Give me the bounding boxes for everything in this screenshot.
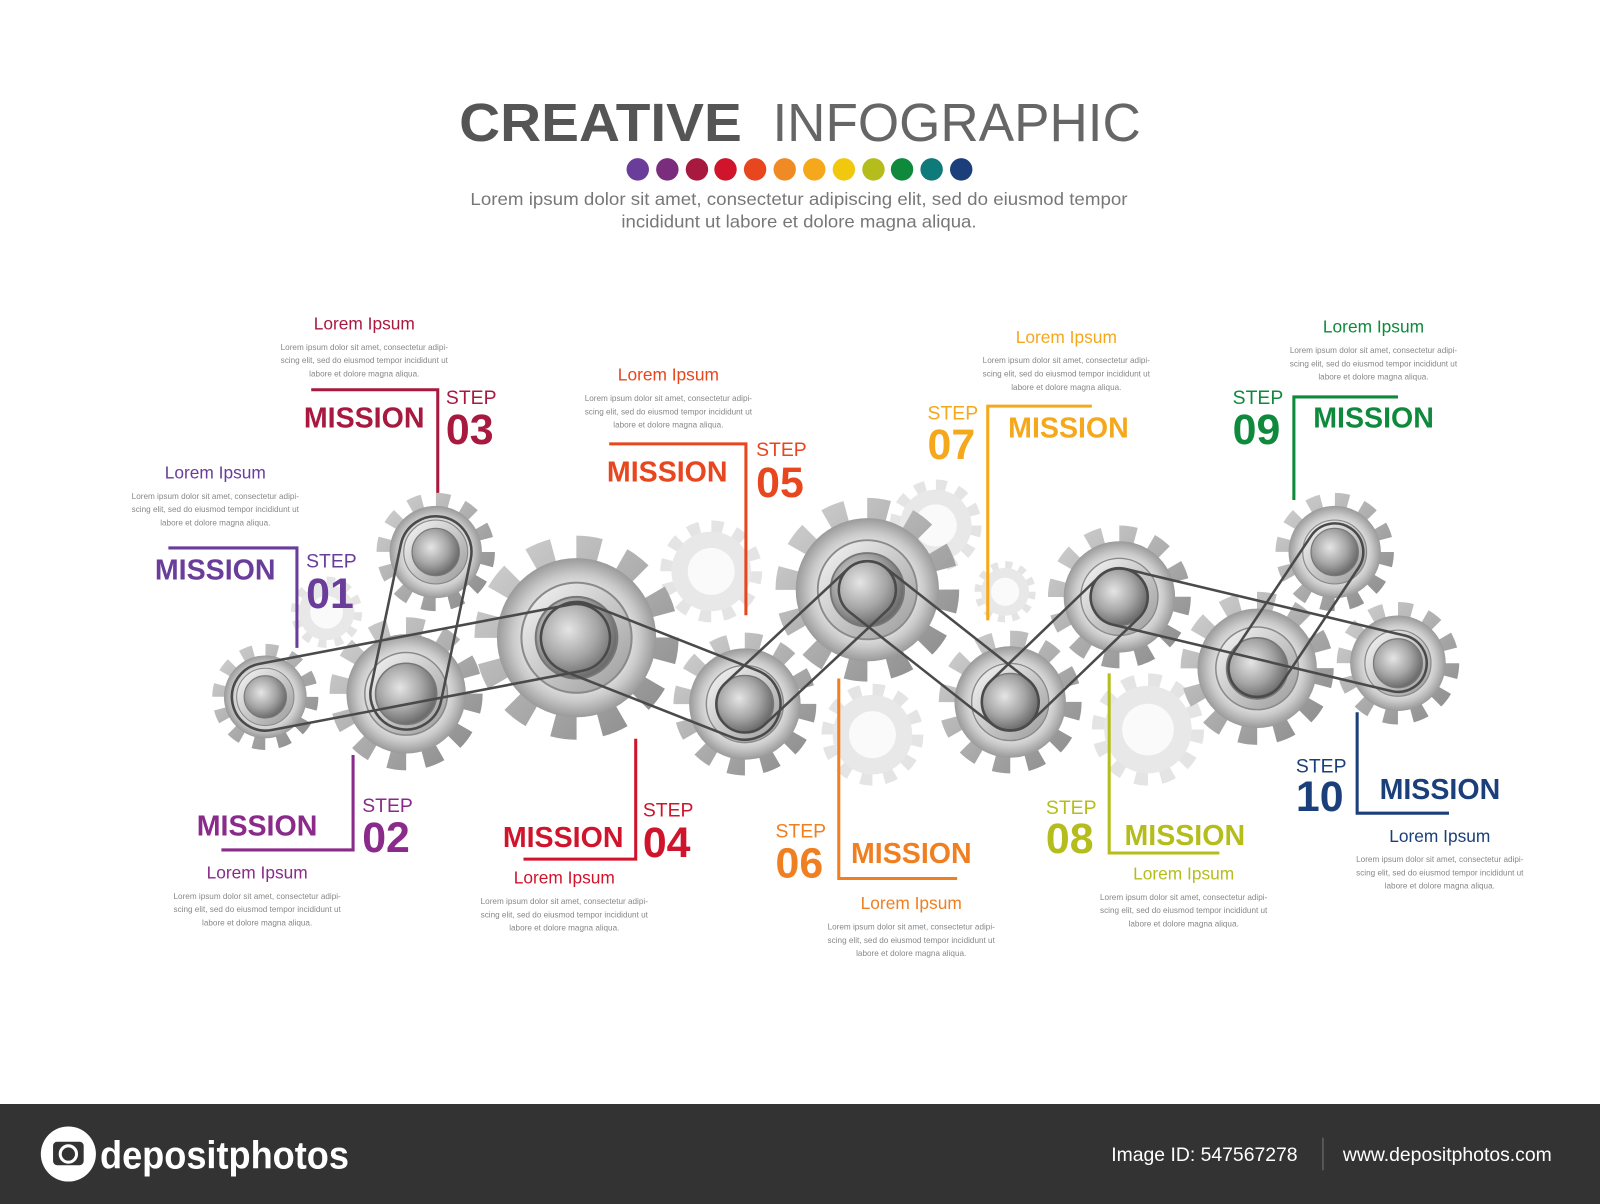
step 04: Lorem Ipsum: [514, 868, 615, 888]
step 01: scing elit, sed do eiusmod tempor incididunt ut: [132, 505, 300, 514]
step 02: STEP: [362, 795, 413, 817]
step 03: Lorem Ipsum: [314, 314, 415, 334]
footer logo: [41, 1126, 349, 1182]
step 04: STEP: [643, 799, 693, 821]
step 10: [1296, 712, 1524, 891]
step 09: STEP: [1233, 387, 1283, 409]
subtitle: [470, 189, 1128, 232]
step 02: scing elit, sed do eiusmod tempor incididunt ut: [173, 905, 342, 914]
step 07: labore et dolore magna aliqua.: [1011, 383, 1121, 392]
step 01: 01: [306, 570, 354, 618]
step 10: Lorem ipsum dolor sit amet, consectetur adipi-: [1356, 855, 1524, 864]
belts: [226, 510, 1433, 750]
step 08: STEP: [1046, 797, 1097, 819]
step 08: Lorem Ipsum: [1133, 864, 1234, 884]
step 01: labore et dolore magna aliqua.: [160, 518, 270, 527]
step 03: Lorem ipsum dolor sit amet, consectetur adipi-: [281, 343, 448, 352]
step 08: MISSION: [1124, 820, 1245, 852]
title: INFOGRAPHIC: [772, 93, 1141, 153]
step 04: Lorem ipsum dolor sit amet, consectetur adipi-: [481, 897, 648, 906]
step 09: Lorem Ipsum: [1323, 317, 1424, 337]
step 03: 03: [446, 406, 494, 454]
step 03: scing elit, sed do eiusmod tempor incididunt ut: [281, 356, 449, 365]
step 10: MISSION: [1380, 774, 1500, 806]
step 01: Lorem Ipsum: [165, 463, 266, 483]
color dots: [627, 158, 972, 181]
step 05: [585, 365, 807, 615]
step 06: STEP: [776, 821, 826, 843]
step 03: [281, 314, 497, 493]
step 07: [928, 327, 1151, 620]
step 05: 05: [756, 459, 804, 507]
step 09: labore et dolore magna aliqua.: [1318, 373, 1429, 382]
step 08: Lorem ipsum dolor sit amet, consectetur adipi-: [1100, 893, 1268, 902]
step 09: scing elit, sed do eiusmod tempor incididunt ut: [1290, 359, 1458, 368]
step 05: STEP: [756, 439, 807, 461]
title: CREATIVE: [459, 93, 742, 153]
step 06: Lorem ipsum dolor sit amet, consectetur adipi-: [828, 923, 995, 932]
step 06: labore et dolore magna aliqua.: [856, 949, 966, 958]
step 04: 04: [643, 819, 691, 867]
step 08: labore et dolore magna aliqua.: [1129, 919, 1239, 928]
step 08: scing elit, sed do eiusmod tempor incididunt ut: [1100, 906, 1268, 915]
step 07: Lorem Ipsum: [1016, 327, 1117, 347]
step 10: scing elit, sed do eiusmod tempor incididunt ut: [1356, 868, 1524, 877]
step 05: Lorem ipsum dolor sit amet, consectetur adipi-: [585, 394, 752, 403]
title: [459, 93, 1141, 153]
step 05: labore et dolore magna aliqua.: [613, 421, 723, 430]
footer info: www.depositphotos.com: [1342, 1144, 1552, 1166]
step 02: Lorem Ipsum: [207, 863, 308, 883]
step 09: MISSION: [1313, 403, 1434, 435]
step 03: MISSION: [304, 403, 424, 435]
step 01: [132, 463, 357, 648]
footer logo: depositphotos: [100, 1134, 349, 1177]
step 10: 10: [1296, 773, 1344, 821]
step 04: MISSION: [503, 822, 623, 854]
step 09: [1233, 317, 1458, 500]
footer info: [1111, 1138, 1552, 1170]
step 04: scing elit, sed do eiusmod tempor incididunt ut: [481, 910, 649, 919]
gear train: [220, 501, 1451, 765]
step 06: Lorem Ipsum: [861, 893, 962, 913]
subtitle: Lorem ipsum dolor sit amet, consectetur adipiscing elit, sed do eiusmod tempor: [470, 189, 1128, 209]
step 02: labore et dolore magna aliqua.: [202, 918, 312, 927]
step 07: MISSION: [1008, 413, 1129, 445]
step 08: 08: [1046, 815, 1094, 863]
step 02: MISSION: [197, 811, 317, 843]
step 02: Lorem ipsum dolor sit amet, consectetur adipi-: [173, 892, 341, 901]
step 01: Lorem ipsum dolor sit amet, consectetur adipi-: [132, 492, 299, 501]
background gears: [296, 486, 1196, 779]
footer info: Image ID: 547567278: [1111, 1144, 1298, 1166]
step 02: [173, 755, 413, 927]
step 06: [776, 679, 996, 958]
step 07: Lorem ipsum dolor sit amet, consectetur adipi-: [983, 356, 1150, 365]
step 03: labore et dolore magna aliqua.: [309, 370, 419, 379]
step 01: STEP: [306, 550, 357, 572]
step 07: 07: [928, 421, 975, 469]
footer bar: [0, 1104, 1600, 1204]
step 10: labore et dolore magna aliqua.: [1385, 882, 1495, 891]
step 01: MISSION: [155, 555, 276, 587]
step 05: scing elit, sed do eiusmod tempor incididunt ut: [585, 407, 753, 416]
step 10: Lorem Ipsum: [1389, 826, 1490, 846]
step 09: Lorem ipsum dolor sit amet, consectetur adipi-: [1290, 346, 1457, 355]
step 06: 06: [776, 839, 823, 887]
step 06: MISSION: [851, 838, 972, 870]
step 08: [1046, 673, 1268, 928]
subtitle: incididunt ut labore et dolore magna aliqua.: [621, 212, 977, 232]
step 06: scing elit, sed do eiusmod tempor incididunt ut: [828, 936, 996, 945]
step 07: scing elit, sed do eiusmod tempor incididunt ut: [983, 370, 1151, 379]
step 10: STEP: [1296, 755, 1347, 777]
step 04: [481, 739, 693, 933]
step 04: labore et dolore magna aliqua.: [509, 924, 619, 933]
step 09: 09: [1233, 406, 1280, 454]
step 07: STEP: [928, 402, 978, 424]
step 05: MISSION: [607, 457, 728, 489]
step 02: 02: [362, 814, 410, 862]
step 05: Lorem Ipsum: [618, 365, 719, 385]
step 03: STEP: [446, 387, 497, 409]
